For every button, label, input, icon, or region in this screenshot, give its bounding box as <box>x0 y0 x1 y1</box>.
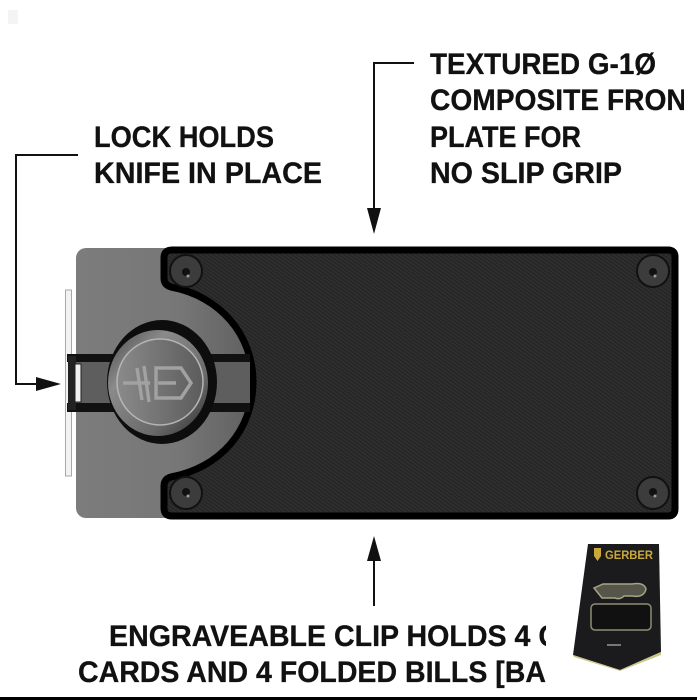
metal plate <box>76 248 260 518</box>
callout: textured G-10 front plate: NO SLIP GRIP <box>430 157 622 190</box>
callout: lock holds knife: KNIFE IN PLACE <box>94 157 322 190</box>
arrow: to engraveable clip <box>367 536 381 606</box>
screw: bottom right <box>637 477 669 509</box>
textured front plate <box>164 250 675 516</box>
callout: lock holds knife: LOCK HOLDS <box>94 121 274 154</box>
lock bar <box>67 354 250 412</box>
lock disc with logo <box>107 320 217 444</box>
screw: top left <box>170 255 202 287</box>
callout: engraveable clip <box>79 625 546 688</box>
clip on card <box>591 604 651 630</box>
callout: textured G-10 front plate <box>430 52 684 184</box>
knife on card <box>594 584 646 599</box>
model label <box>607 644 621 646</box>
callout: engraveable clip: ENGRAVEABLE CLIP HOLDS 4 C <box>109 620 559 653</box>
arrow: to front plate <box>367 63 414 234</box>
callout: lock holds knife <box>94 121 322 190</box>
icon: brand mark <box>594 548 601 561</box>
screw: top right <box>637 255 669 287</box>
callout: textured G-10 front plate: TEXTURED G-1Ø <box>430 48 656 81</box>
callout: engraveable clip: CARDS AND 4 FOLDED BILLS [BA <box>78 656 546 689</box>
icon: Gerber logo <box>123 366 191 402</box>
screw: bottom left <box>170 477 202 509</box>
hinge clip <box>66 290 72 476</box>
brand name: GERBER <box>605 550 654 562</box>
callout: textured G-10 front plate: PLATE FOR <box>430 121 581 154</box>
product package <box>573 544 661 671</box>
arrow: to lock <box>16 155 78 391</box>
device: clip knife <box>66 248 675 518</box>
bottom bar <box>0 697 697 700</box>
